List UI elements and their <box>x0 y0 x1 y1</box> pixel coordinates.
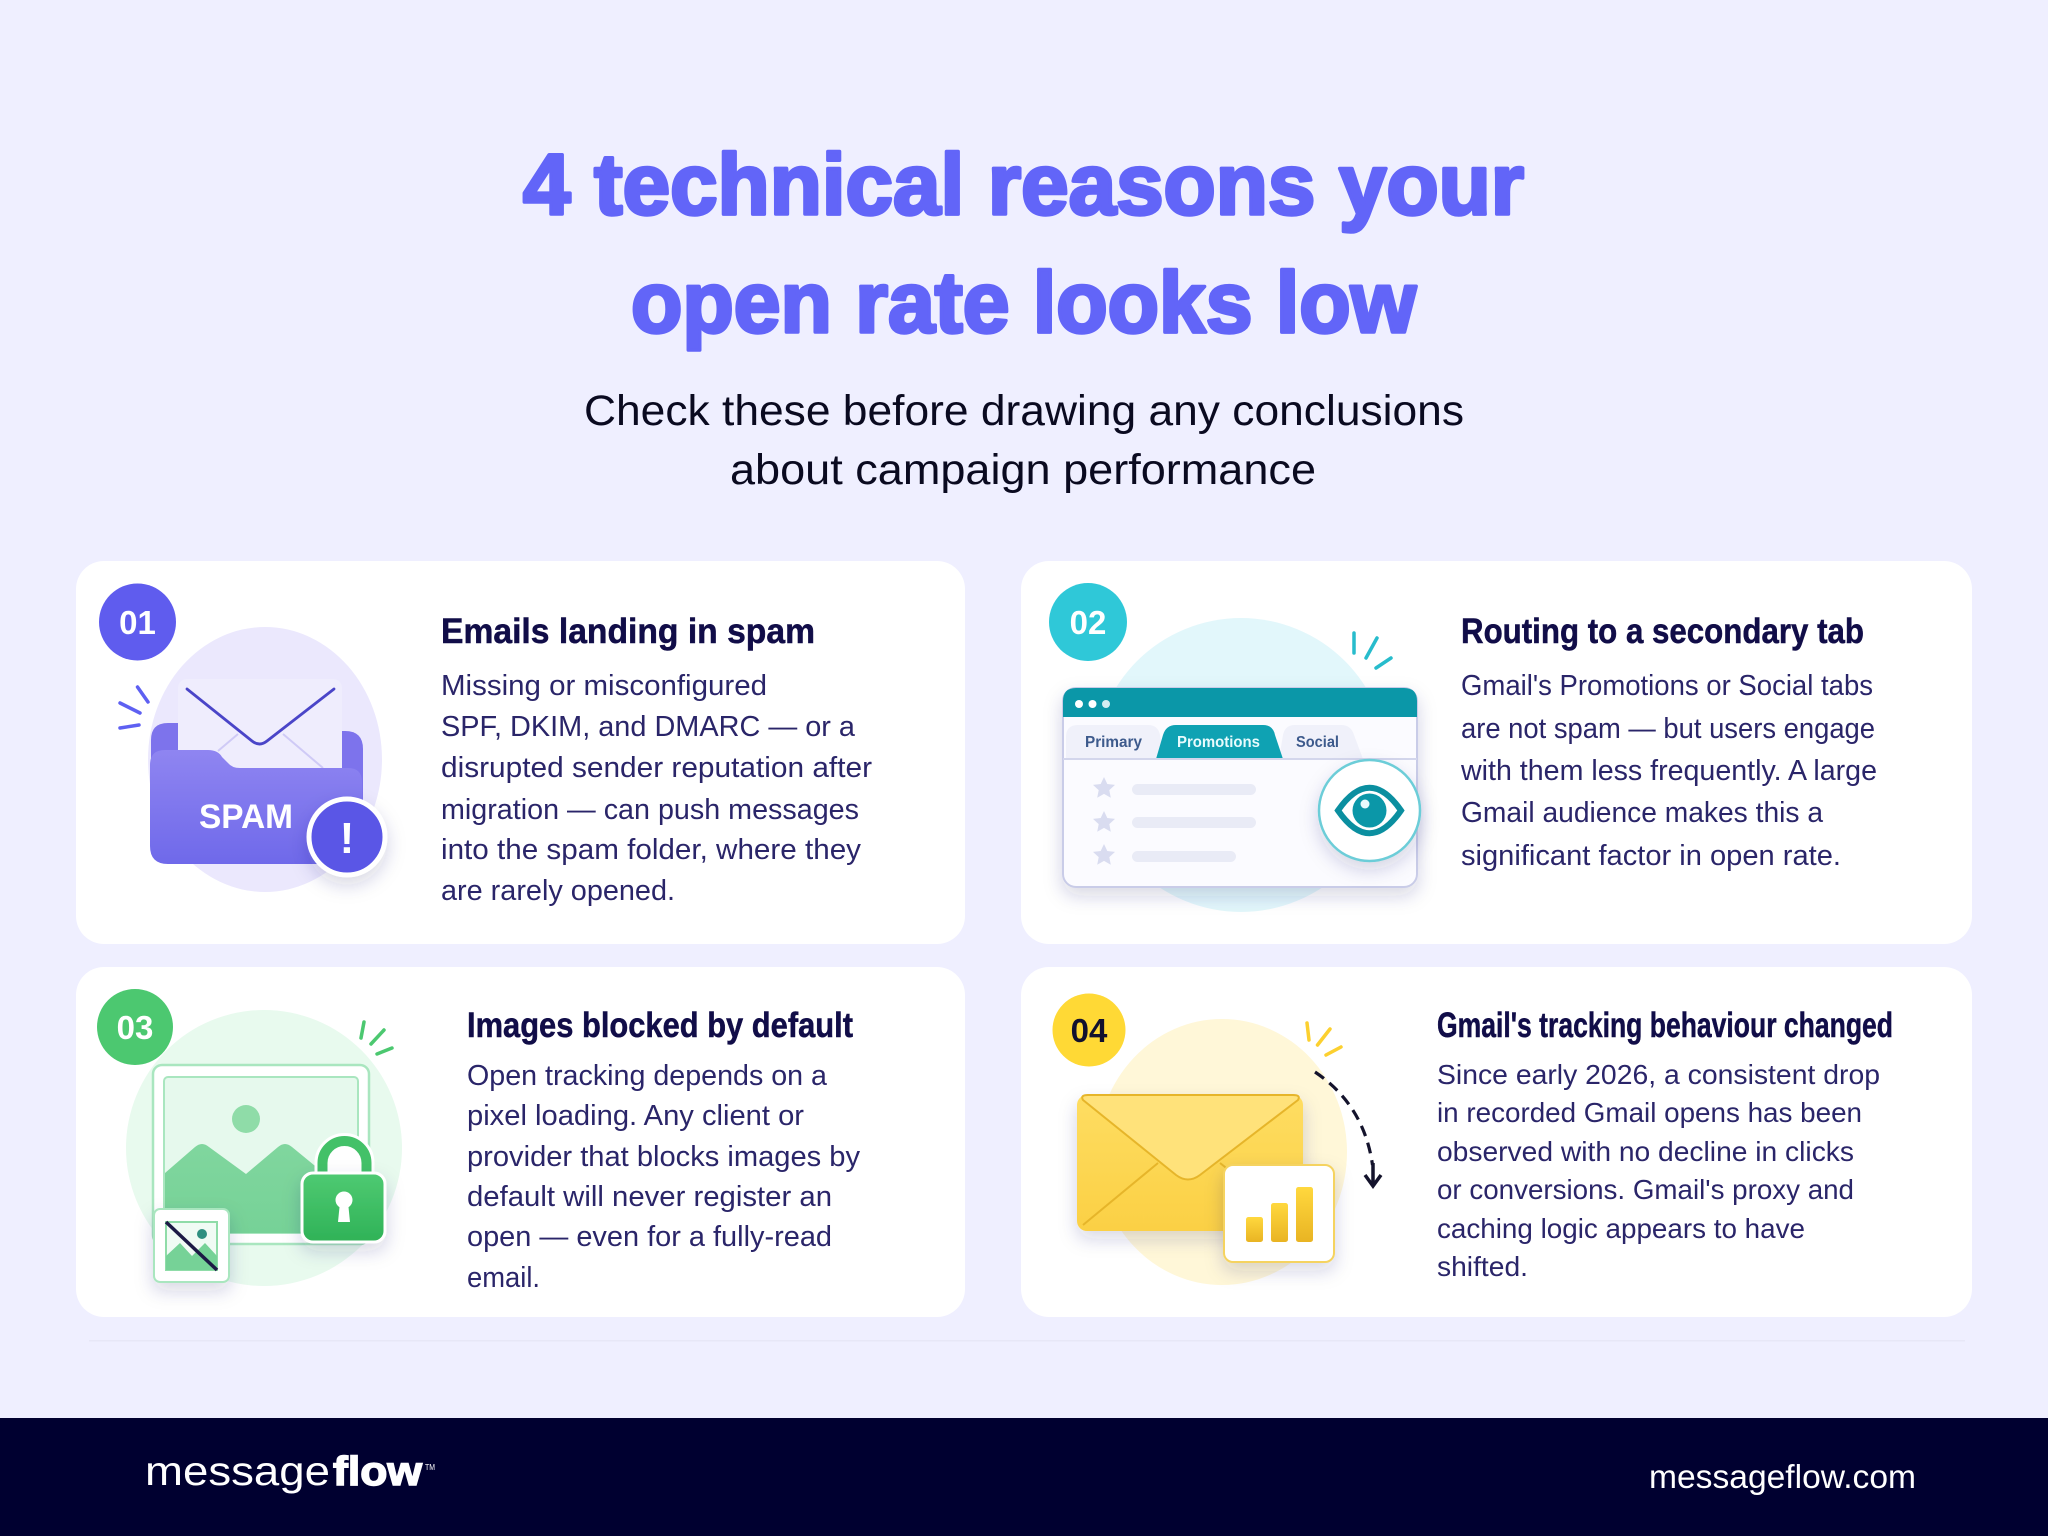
title <box>523 137 1524 351</box>
panel: 02 routing to a secondary tab <box>1021 561 1972 944</box>
number badge 04 <box>1052 994 1126 1066</box>
logo <box>145 1448 435 1494</box>
body text: shifted. <box>1437 1251 1528 1282</box>
heading: Gmail's tracking behaviour changed <box>1437 1006 1893 1045</box>
title: 4 technical reasons your <box>523 137 1524 233</box>
body text: into the spam folder, where they <box>441 834 862 866</box>
body text <box>467 1060 860 1294</box>
footer bar <box>0 1418 2048 1536</box>
logo: flow <box>333 1448 422 1494</box>
subtitle <box>584 387 1464 494</box>
logo: TM <box>425 1463 435 1472</box>
body text: open — even for a fully-read <box>467 1221 832 1253</box>
body text: pixel loading. Any client or <box>467 1100 804 1132</box>
icon: inbox window with eye: Primary <box>1085 734 1142 751</box>
subtitle: about campaign performance <box>730 446 1316 494</box>
number badge 03: 03 <box>117 1009 153 1046</box>
number badge 04: 04 <box>1071 1012 1108 1049</box>
website: messageflow.com <box>1649 1458 1916 1495</box>
body text: or conversions. Gmail's proxy and <box>1437 1174 1854 1205</box>
number badge 01 <box>99 584 176 660</box>
subtitle: Check these before drawing any conclusions <box>584 387 1464 435</box>
body text: migration — can push messages <box>441 794 859 826</box>
icon: yellow envelope with chart <box>1077 1019 1381 1285</box>
body text: disrupted sender reputation after <box>441 752 872 784</box>
body text: are not spam — but users engage <box>1461 713 1875 745</box>
body text: significant factor in open rate. <box>1461 840 1841 872</box>
icon: blocked image with padlock <box>126 1010 402 1286</box>
heading: Images blocked by default <box>467 1006 853 1045</box>
body text: in recorded Gmail opens has been <box>1437 1097 1862 1128</box>
logo: message <box>145 1448 330 1494</box>
title: open rate looks low <box>631 255 1417 351</box>
body text: Open tracking depends on a <box>467 1060 828 1092</box>
body text <box>1460 670 1877 872</box>
body text: default will never register an <box>467 1181 832 1213</box>
body text <box>441 670 872 907</box>
number badge 03 <box>97 989 173 1065</box>
body text: Gmail audience makes this a <box>1461 797 1824 829</box>
icon: inbox window with eye <box>1063 618 1420 912</box>
body text: caching logic appears to have <box>1437 1213 1805 1244</box>
body text: provider that blocks images by <box>467 1141 860 1173</box>
body text: are rarely opened. <box>441 875 675 907</box>
icon: spam folder: SPAM <box>199 798 293 836</box>
icon: inbox window with eye: Social <box>1296 734 1339 751</box>
number badge 02 <box>1049 583 1127 661</box>
panel: 03 images blocked by default <box>76 967 965 1317</box>
heading: Emails landing in spam <box>441 612 815 651</box>
icon: inbox window with eye: Promotions <box>1177 734 1260 751</box>
body text: SPF, DKIM, and DMARC — or a <box>441 711 856 743</box>
icon: spam folder <box>120 627 385 892</box>
panel: 01 emails landing in spam <box>76 561 965 944</box>
heading: Routing to a secondary tab <box>1461 612 1864 651</box>
body text: Gmail's Promotions or Social tabs <box>1461 670 1873 702</box>
icon: spam folder: ! <box>340 814 354 863</box>
number badge 02: 02 <box>1070 604 1106 641</box>
body text: email. <box>467 1262 540 1294</box>
panel: 04 gmail's tracking behaviour changed <box>1021 967 1972 1317</box>
body text: with them less frequently. A large <box>1460 755 1877 787</box>
body text: Since early 2026, a consistent drop <box>1437 1059 1880 1090</box>
number badge 01: 01 <box>119 604 156 641</box>
body text: Missing or misconfigured <box>441 670 767 702</box>
body text: observed with no decline in clicks <box>1437 1136 1854 1167</box>
body text <box>1437 1059 1880 1282</box>
